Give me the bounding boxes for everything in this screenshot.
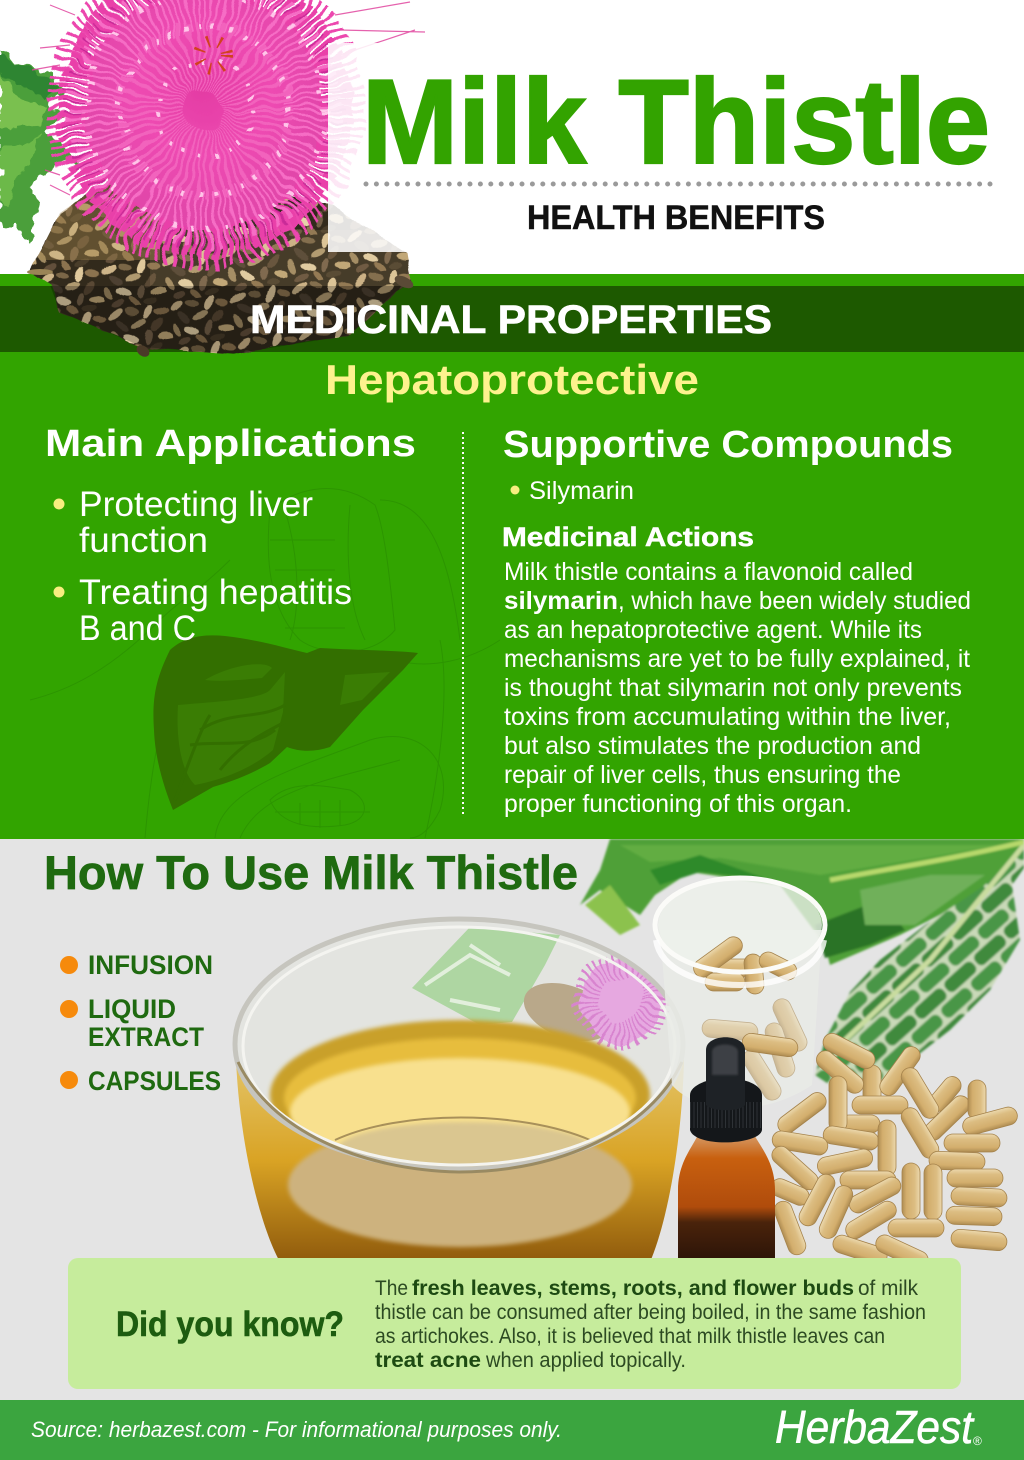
photo: dropper bottle bbox=[678, 1037, 775, 1258]
bullet: infusion: INFUSION bbox=[88, 950, 213, 980]
title divider bbox=[366, 182, 990, 186]
bullet: treating hepatitis bbox=[54, 573, 352, 648]
list: forms of use bbox=[60, 950, 221, 1096]
medicinal actions text: silymarin bbox=[504, 587, 618, 615]
callout text: The bbox=[375, 1277, 408, 1300]
medicinal actions text: , which have been widely studied bbox=[618, 587, 971, 615]
heading: main applications: Main Applications bbox=[45, 423, 416, 465]
medicinal actions text: but also stimulates the production and bbox=[504, 732, 921, 760]
bullet: protecting liver function bbox=[54, 485, 313, 560]
bullet: protecting liver function: function bbox=[79, 521, 208, 560]
source note: Source: herbazest.com - For informational purposes only. bbox=[31, 1417, 562, 1442]
heading: supportive compounds: Supportive Compounds bbox=[503, 424, 953, 466]
logo: HerbaZest: HerbaZest bbox=[775, 1401, 975, 1453]
medicinal actions text: repair of liver cells, thus ensuring the bbox=[504, 761, 901, 789]
title: Milk Thistle bbox=[362, 55, 990, 189]
header band bbox=[0, 286, 1024, 352]
callout text: fresh leaves, stems, roots, and flower buds bbox=[412, 1277, 854, 1300]
bullet: capsules: CAPSULES bbox=[88, 1066, 221, 1096]
category heading: Hepatoprotective bbox=[325, 356, 699, 403]
heading: how to use: How To Use Milk Thistle bbox=[44, 846, 578, 899]
panel: how to use bbox=[0, 839, 1024, 1400]
medicinal actions text: is thought that silymarin not only prevents bbox=[504, 674, 962, 702]
bullet: silymarin: Silymarin bbox=[529, 477, 634, 505]
medicinal actions text: as an hepatoprotective agent. While its bbox=[504, 616, 922, 644]
logo: HerbaZest: ® bbox=[973, 1434, 982, 1448]
seed pile bbox=[27, 184, 414, 357]
callout text bbox=[375, 1277, 926, 1372]
panel: medicinal properties bbox=[0, 274, 1024, 839]
white veil behind title bbox=[328, 43, 418, 252]
callout text: when applied topically. bbox=[485, 1349, 686, 1372]
heading: medicinal actions: Medicinal Actions bbox=[502, 522, 754, 552]
bullet: liquid extract: EXTRACT bbox=[88, 1022, 204, 1052]
icon: thistle flower bbox=[32, 0, 425, 255]
medicinal actions text: toxins from accumulating within the liver, bbox=[504, 703, 951, 731]
bullet: treating hepatitis: Treating hepatitis bbox=[79, 573, 352, 612]
band heading: MEDICINAL PROPERTIES bbox=[250, 298, 772, 342]
medicinal actions text bbox=[504, 558, 971, 818]
icon: thistle leaves bbox=[0, 50, 80, 242]
medicinal actions text: proper functioning of this organ. bbox=[504, 790, 852, 818]
bullet: liquid extract bbox=[60, 994, 204, 1052]
bullet: protecting liver function: Protecting liver bbox=[79, 485, 313, 524]
callout heading: Did you know? bbox=[116, 1305, 344, 1344]
callout text: of milk bbox=[858, 1277, 918, 1300]
bullet: treating hepatitis: B and C bbox=[79, 609, 196, 648]
photo: loose capsules bbox=[768, 1030, 1019, 1272]
anatomy sketch background bbox=[30, 489, 500, 838]
photo: leaves bbox=[580, 839, 1024, 1088]
callout text: thistle can be consumed after being boiled, in the same fashion bbox=[375, 1301, 926, 1324]
callout: did you know bbox=[68, 1258, 961, 1389]
bullet: liquid extract: LIQUID bbox=[88, 994, 176, 1024]
photo: jar of capsules bbox=[655, 878, 825, 1108]
medicinal actions text: Milk thistle contains a flavonoid called bbox=[504, 558, 913, 586]
callout text: treat acne bbox=[375, 1349, 481, 1372]
supportive compounds column bbox=[502, 424, 971, 818]
subtitle: HEALTH BENEFITS bbox=[527, 199, 825, 237]
column divider bbox=[462, 432, 464, 815]
callout text: as artichokes. Also, it is believed that milk thistle leaves can bbox=[375, 1325, 885, 1348]
main applications column bbox=[45, 423, 416, 648]
medicinal actions text: mechanisms are yet to be fully explained, it bbox=[504, 645, 970, 673]
footer bbox=[0, 1400, 1024, 1460]
liver illustration bbox=[153, 635, 418, 810]
photo: glass bowl of infusion bbox=[235, 919, 684, 1262]
